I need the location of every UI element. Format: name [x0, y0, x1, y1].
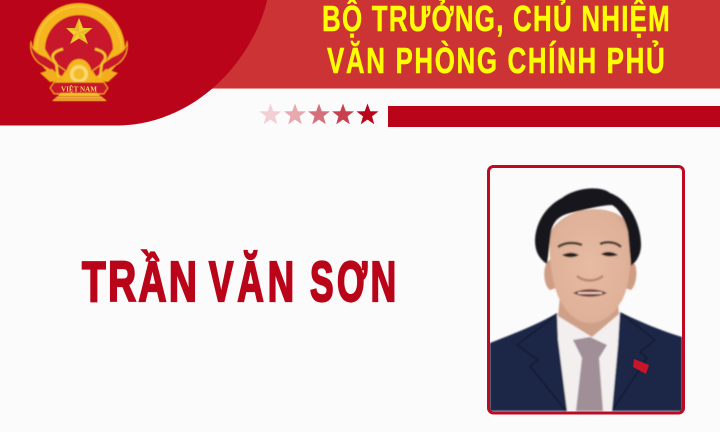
mouth — [573, 289, 607, 297]
icon: national emblem — [30, 3, 128, 101]
name: SƠN — [310, 251, 396, 314]
red curved header shape — [0, 0, 267, 126]
suit — [490, 312, 682, 411]
portrait photo — [488, 166, 684, 413]
photo background — [488, 166, 684, 413]
ears — [544, 260, 636, 290]
face — [549, 209, 630, 323]
red divider bar — [388, 106, 720, 127]
name — [82, 250, 396, 314]
neck — [558, 296, 619, 337]
star rating row — [260, 104, 378, 124]
icon: lapel pin — [633, 359, 649, 374]
hair — [535, 188, 641, 266]
icon: national emblem: VIỆT NAM — [61, 84, 97, 94]
icon: emblem star — [66, 18, 92, 44]
portrait figure — [490, 188, 682, 411]
name: TRẦN — [82, 251, 197, 314]
eyes — [562, 252, 618, 257]
header banner — [0, 0, 720, 89]
title: VĂN PHÒNG CHÍNH PHỦ — [327, 40, 665, 81]
name: VĂN — [209, 250, 294, 314]
eyebrows — [558, 242, 621, 247]
title — [322, 0, 670, 81]
tie — [573, 337, 607, 411]
lapel lines — [517, 314, 655, 411]
title: BỘ TRƯỞNG, CHỦ NHIỆM — [322, 0, 670, 39]
shirt — [557, 312, 620, 411]
nose shadow — [577, 276, 603, 280]
red photo frame — [488, 166, 684, 413]
